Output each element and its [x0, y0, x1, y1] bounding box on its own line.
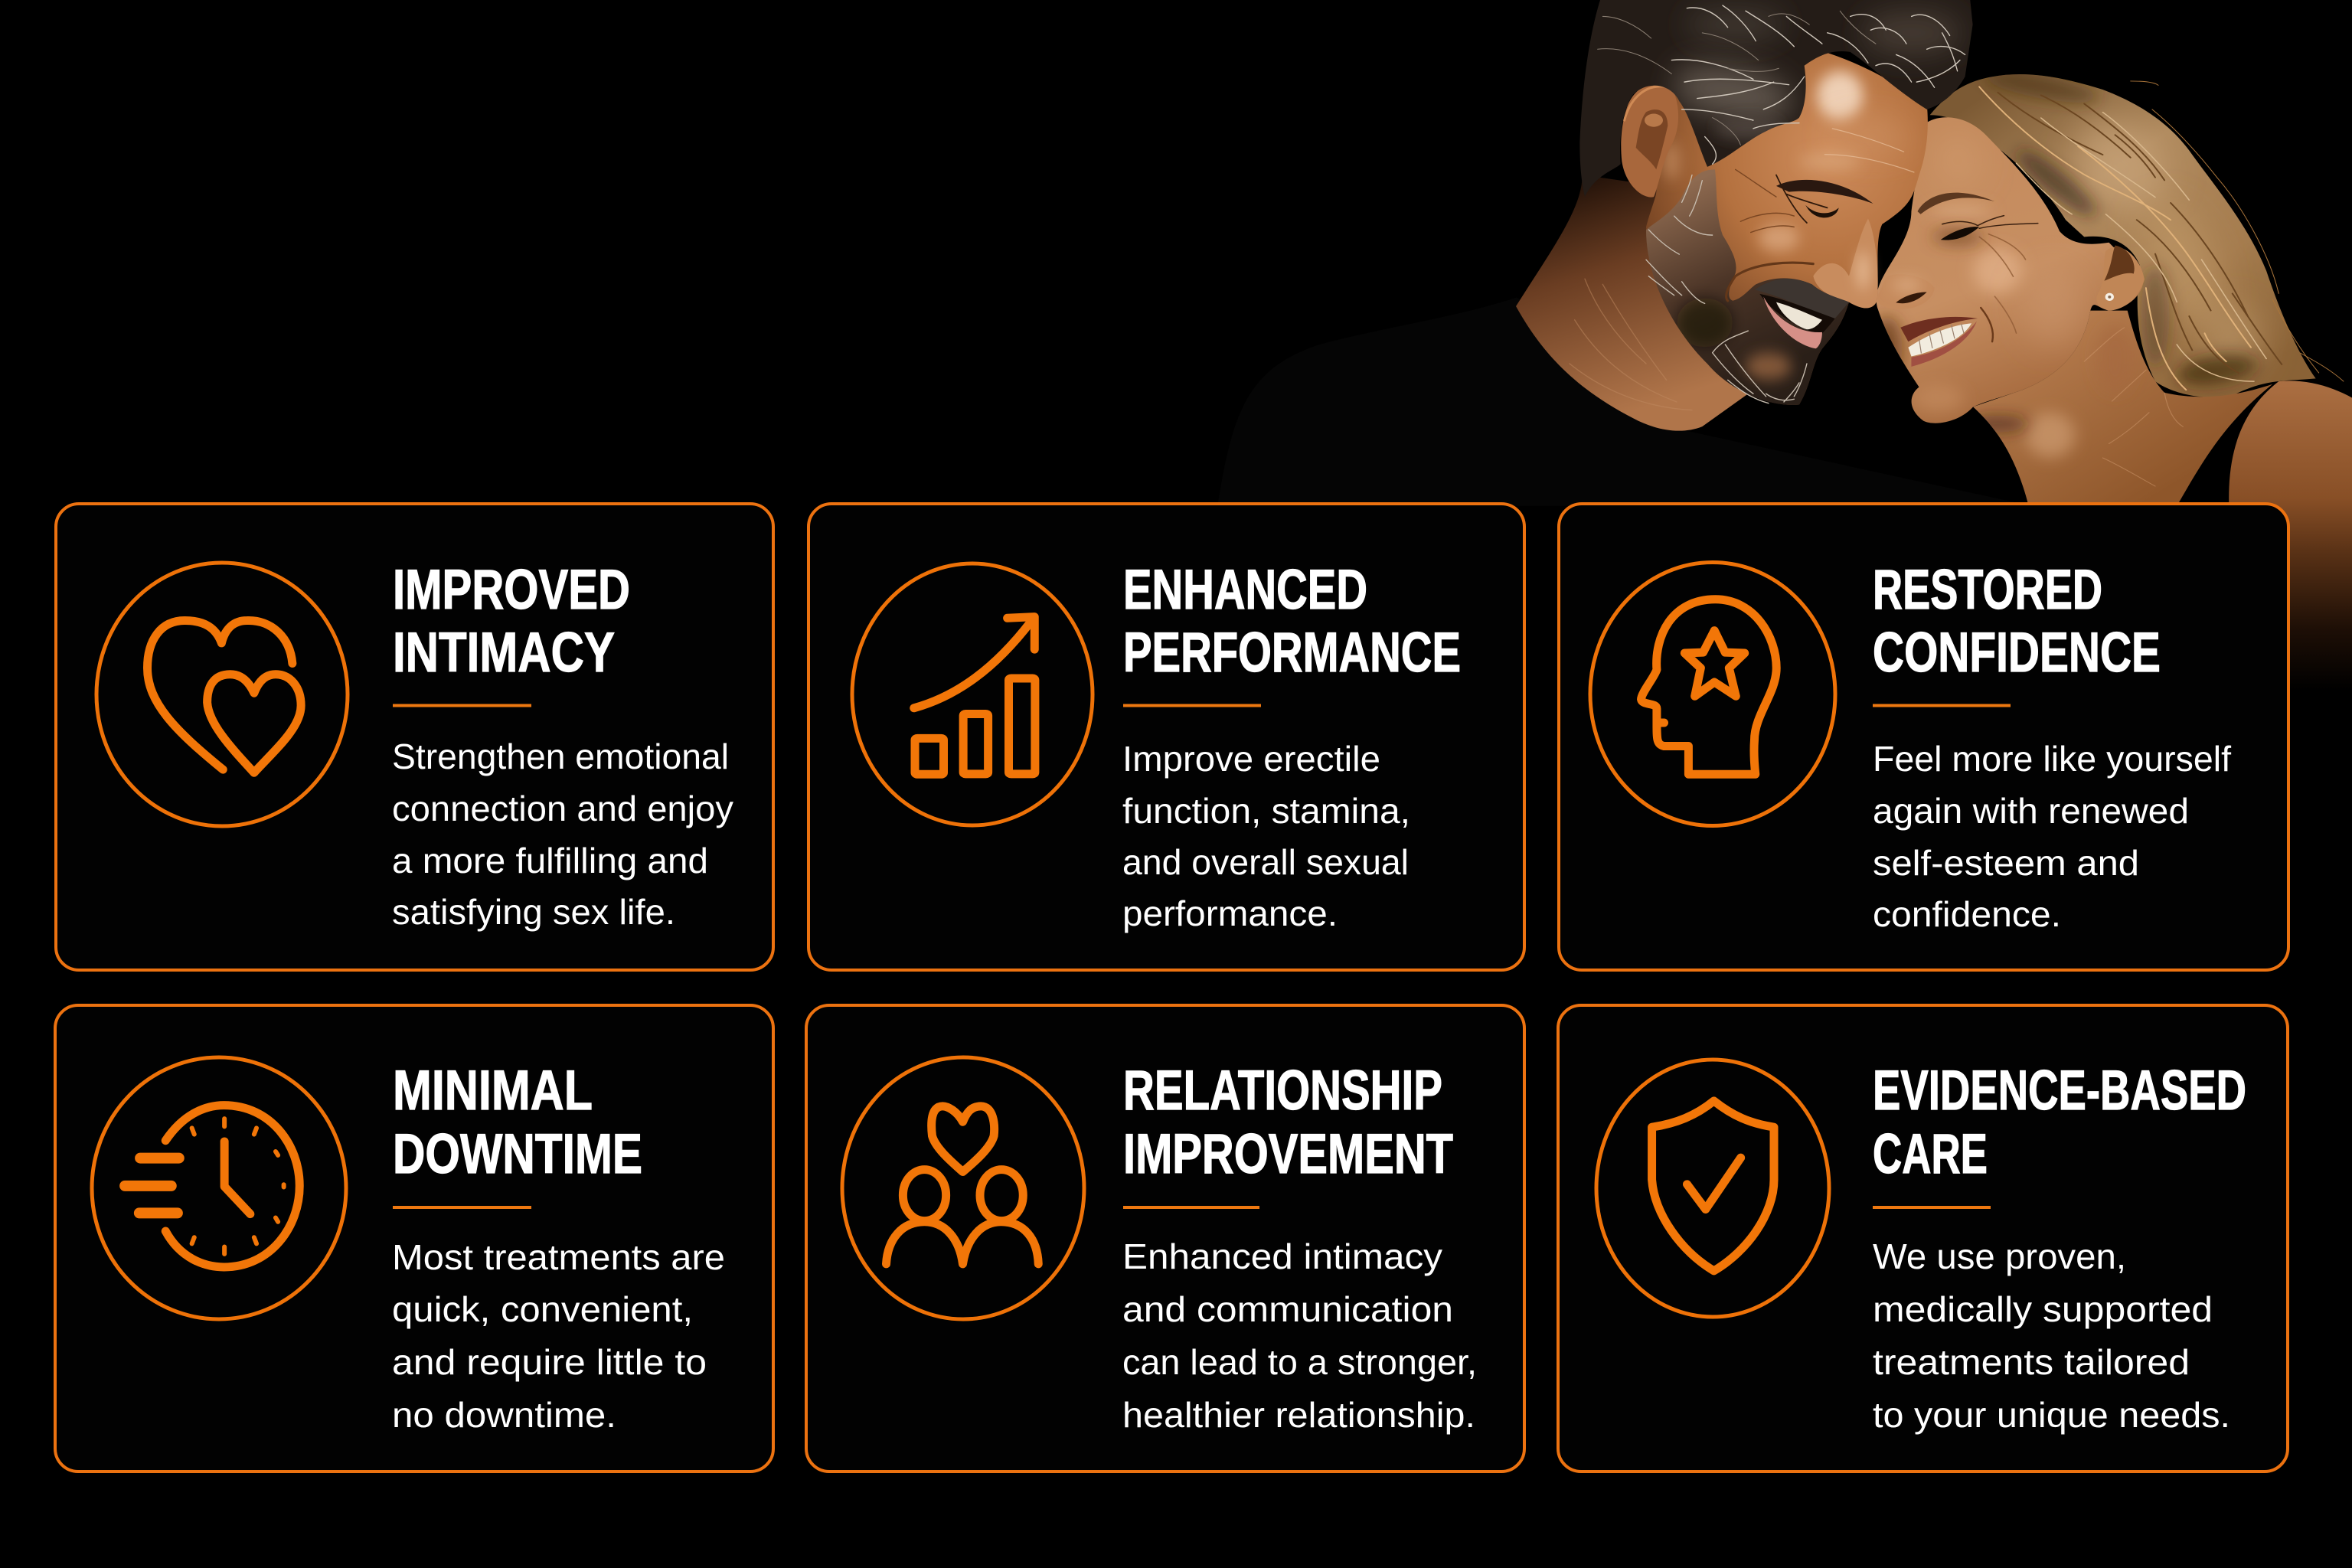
- man's nose: [1726, 219, 1878, 308]
- heading: [1873, 1060, 2246, 1185]
- description: confidence.: [1873, 894, 2061, 934]
- description: and overall sexual: [1122, 842, 1409, 882]
- man's ear: [1621, 83, 1678, 198]
- man's moustache and smile: [1755, 279, 1849, 348]
- man's hair: [1579, 0, 1973, 197]
- description: healthier relationship.: [1122, 1395, 1475, 1435]
- card border: [806, 1005, 1524, 1472]
- heading: [1123, 1060, 1453, 1185]
- divider: [1123, 1206, 1259, 1209]
- description: can lead to a stronger,: [1122, 1342, 1477, 1382]
- heading: [393, 559, 630, 684]
- heading: [1873, 559, 2161, 684]
- description: and require little to: [392, 1342, 707, 1382]
- heading: CONFIDENCE: [1873, 622, 2161, 684]
- divider: [1123, 704, 1261, 707]
- icon: shield with check in ring: [1596, 1060, 1829, 1317]
- panel: relationship improvement: [806, 1005, 1524, 1472]
- card border: [1558, 1005, 2288, 1472]
- heading: CARE: [1873, 1123, 1988, 1185]
- divider: [1873, 704, 2011, 707]
- man's skin tones: [1663, 71, 1912, 252]
- card border: [56, 504, 773, 970]
- description: [392, 1237, 725, 1435]
- woman's shoulder: [2229, 381, 2352, 696]
- description: self-esteem and: [1873, 843, 2139, 883]
- heading: RELATIONSHIP: [1123, 1060, 1442, 1122]
- description: [392, 737, 733, 932]
- description: to your unique needs.: [1873, 1395, 2230, 1435]
- heading: PERFORMANCE: [1123, 622, 1461, 684]
- description: Strengthen emotional: [392, 737, 729, 776]
- card border: [1559, 504, 2288, 970]
- description: performance.: [1122, 893, 1338, 933]
- woman's earring: [2105, 293, 2114, 301]
- heading: ENHANCED: [1123, 559, 1367, 621]
- heading: [1123, 559, 1461, 684]
- description: again with renewed: [1873, 791, 2189, 831]
- description: Most treatments are: [392, 1237, 725, 1277]
- woman: [1871, 64, 2352, 696]
- panel: restored confidence: [1559, 504, 2288, 970]
- description: satisfying sex life.: [392, 892, 675, 932]
- divider: [393, 1206, 531, 1209]
- woman's nose: [1877, 274, 1935, 309]
- icon: two hearts in ring: [96, 563, 348, 826]
- woman's skin tones: [1871, 132, 2084, 413]
- panel: improved intimacy: [56, 504, 773, 970]
- description: [1122, 739, 1410, 933]
- icon: fast clock in ring: [92, 1057, 346, 1319]
- woman's face: [1877, 117, 2143, 423]
- man's black t-shirt: [1217, 297, 2031, 506]
- description: quick, convenient,: [392, 1289, 693, 1329]
- heading: INTIMACY: [393, 622, 615, 684]
- icon: head with star in ring: [1590, 562, 1835, 825]
- card border: [808, 504, 1524, 970]
- description: Enhanced intimacy: [1122, 1236, 1442, 1276]
- man's face: [1646, 52, 1928, 405]
- man: [1516, 0, 1973, 431]
- description: [1122, 1236, 1477, 1435]
- divider: [1873, 1206, 1991, 1209]
- heading: DOWNTIME: [393, 1123, 642, 1185]
- hair tones: [1981, 64, 2263, 390]
- icon: two people with heart in ring: [842, 1057, 1084, 1319]
- description: no downtime.: [392, 1395, 616, 1435]
- description: Improve erectile: [1122, 739, 1380, 779]
- description: [1873, 1236, 2230, 1435]
- heading: RESTORED: [1873, 559, 2102, 621]
- description: function, stamina,: [1122, 791, 1410, 831]
- description: [1873, 739, 2231, 934]
- panel: minimal downtime: [55, 1005, 773, 1472]
- heading: IMPROVED: [393, 559, 630, 621]
- photo: smiling couple touching foreheads: [1217, 0, 2352, 696]
- woman's hair mass: [1930, 74, 2316, 397]
- woman's brow and eye: [1918, 193, 2038, 276]
- icon: rising bars and arrow in ring: [852, 564, 1093, 825]
- description: treatments tailored: [1873, 1342, 2190, 1382]
- man's neck: [1516, 175, 1748, 431]
- heading: MINIMAL: [393, 1060, 593, 1122]
- panel: enhanced performance: [808, 504, 1524, 970]
- woman's ear: [2096, 245, 2145, 311]
- heading: IMPROVEMENT: [1123, 1123, 1453, 1185]
- description: connection and enjoy: [392, 789, 733, 828]
- neck highlights and shadow: [1967, 325, 2183, 486]
- description: Feel more like yourself: [1873, 739, 2231, 779]
- man's brow and eye: [1736, 129, 1914, 233]
- man's beard: [1646, 169, 1849, 405]
- neck creases: [1570, 279, 1692, 410]
- hair strands: [1979, 81, 2344, 390]
- card border: [55, 1005, 773, 1472]
- divider: [393, 704, 531, 707]
- woman's neck: [1973, 311, 2272, 506]
- description: and communication: [1122, 1289, 1453, 1329]
- description: We use proven,: [1873, 1236, 2126, 1276]
- panel: evidence-based care: [1558, 1005, 2288, 1472]
- heading: [393, 1060, 642, 1185]
- description: medically supported: [1873, 1289, 2213, 1329]
- description: a more fulfilling and: [392, 841, 708, 880]
- woman's smile: [1900, 296, 2017, 367]
